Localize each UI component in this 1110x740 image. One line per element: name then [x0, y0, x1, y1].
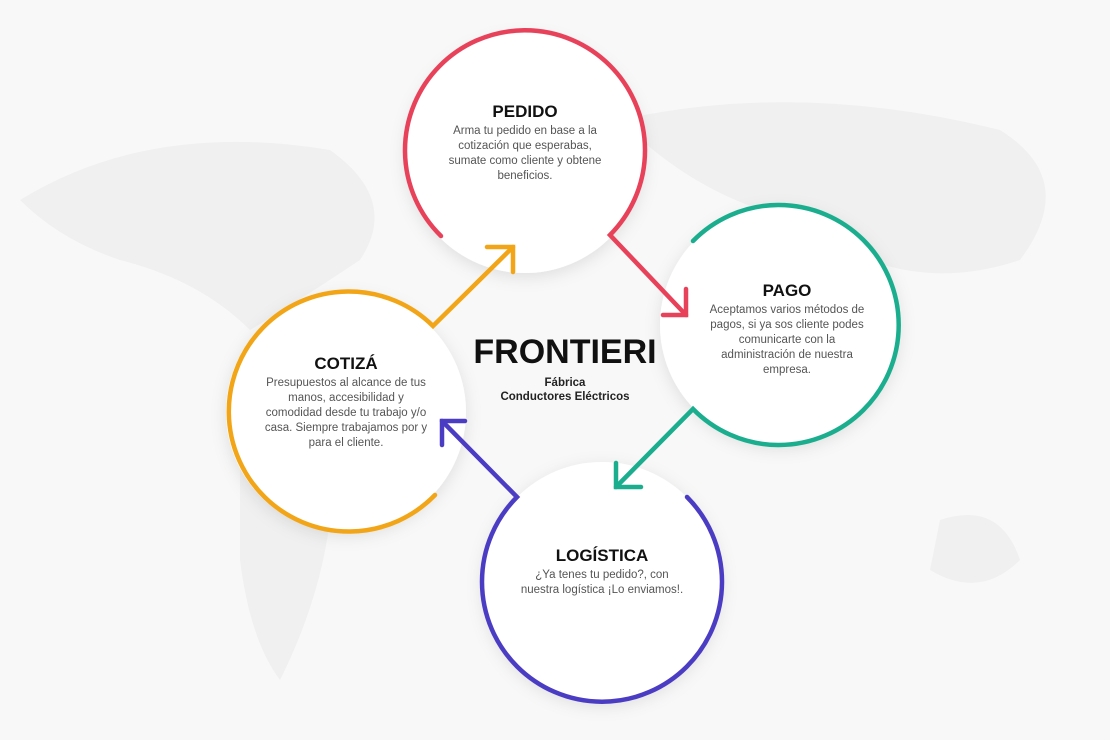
text: PAGO: PAGO [763, 281, 811, 300]
center title [473, 333, 657, 403]
text: PEDIDO: beneficios. [498, 170, 552, 182]
text: PEDIDO: Arma tu pedido en base a la [453, 125, 597, 137]
text: PEDIDO: cotización que esperabas, [458, 140, 592, 152]
background map [20, 102, 1046, 680]
center title: Conductores Eléctricos [500, 391, 630, 403]
red loop PEDIDO [405, 30, 686, 315]
text: COTIZA: casa. Siempre trabajamos por y [265, 422, 427, 434]
text: PAGO [710, 281, 864, 376]
text: PAGO: comunicarte con la [739, 334, 835, 346]
orange loop COTIZA [229, 247, 513, 532]
center title: FRONTIERI [473, 333, 657, 371]
text: COTIZA: comodidad desde tu trabajo y/o [266, 407, 426, 419]
teal loop PAGO [616, 205, 899, 487]
text: PEDIDO: sumate como cliente y obtene [449, 155, 601, 167]
text: COTIZA [265, 354, 428, 449]
text: LOGISTICA [521, 546, 683, 596]
text: PAGO: empresa. [763, 364, 811, 376]
center title: Fábrica [545, 377, 585, 389]
text: PEDIDO [449, 102, 601, 182]
text: COTIZA: Presupuestos al alcance de tus [266, 377, 426, 389]
text: LOGISTICA: LOGÍSTICA [556, 546, 648, 565]
text: COTIZA: para el cliente. [309, 437, 383, 449]
text: PEDIDO: PEDIDO [492, 102, 558, 121]
text: COTIZA: COTIZÁ [314, 354, 378, 373]
purple loop LOGISTICA [442, 421, 722, 702]
text: PAGO: administración de nuestra [721, 349, 853, 361]
text: PAGO: Aceptamos varios métodos de [710, 304, 864, 316]
text: LOGISTICA: ¿Ya tenes tu pedido?, con [535, 569, 669, 581]
text: COTIZA: manos, accesibilidad y [288, 392, 404, 404]
text: PAGO: pagos, si ya sos cliente podes [710, 319, 864, 331]
text: LOGISTICA: nuestra logística ¡Lo enviamos!. [521, 584, 683, 596]
circle backgrounds [226, 33, 900, 702]
